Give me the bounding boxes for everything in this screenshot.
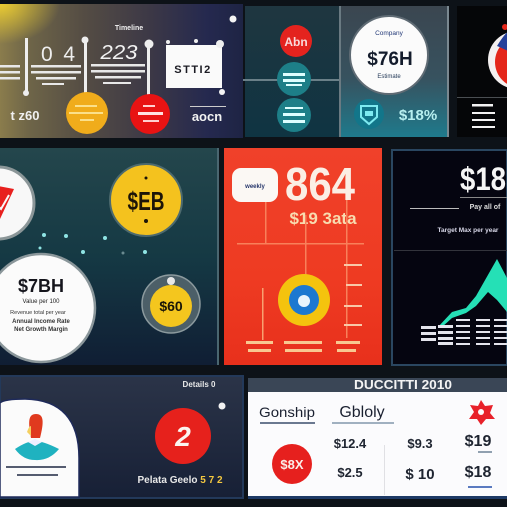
icon: red check circle bbox=[0, 167, 34, 239]
bars bbox=[421, 319, 507, 345]
text block: left bbox=[0, 65, 20, 80]
white arch card bbox=[0, 399, 79, 497]
panel: bottom right table bbox=[248, 378, 507, 499]
dots bbox=[219, 16, 236, 95]
stat: 223: 223 bbox=[99, 42, 138, 64]
panel: black chart bbox=[392, 150, 507, 365]
table values bbox=[334, 433, 491, 483]
timeline stem: second bbox=[82, 36, 88, 98]
circle: red bbox=[130, 94, 170, 134]
rule and caption bbox=[410, 197, 507, 211]
stat: 84: 0 4 bbox=[41, 43, 75, 66]
card: white note: STTI2 bbox=[174, 64, 212, 76]
panel: red chart bbox=[224, 148, 382, 365]
circle: yellow SEB bbox=[110, 164, 182, 236]
circle: price: Estimate bbox=[377, 74, 401, 80]
table values: $2.5 bbox=[337, 465, 363, 480]
circle: white stat bbox=[0, 254, 95, 362]
heading: Details 0 bbox=[183, 380, 216, 389]
stat: 864: 864 bbox=[285, 158, 355, 210]
badge: teal one bbox=[277, 62, 311, 96]
timeline stem: third bbox=[144, 40, 154, 96]
panel: teal icon column bbox=[243, 6, 341, 137]
text block: middle bbox=[31, 65, 81, 85]
dot bbox=[218, 402, 226, 410]
circle: price: Company bbox=[375, 30, 404, 37]
caption two: Target Max per year bbox=[438, 227, 499, 234]
icon: red globe bbox=[488, 24, 507, 89]
subtitle: $19 3ata bbox=[289, 209, 357, 228]
caption: Pelata Geelo 5 7 2 bbox=[137, 475, 223, 486]
label: bottom right: aocn bbox=[192, 109, 222, 124]
circle: price: $76H bbox=[367, 49, 413, 70]
label: bottom left: t z60 bbox=[11, 108, 39, 123]
table sublabels bbox=[468, 451, 492, 488]
circle: white stat: Revenue total per year bbox=[10, 310, 66, 316]
icon: buoy bbox=[15, 414, 59, 460]
rule and caption: Pay all of bbox=[470, 204, 501, 211]
ticks bbox=[344, 264, 362, 326]
badge: red bbox=[272, 444, 312, 484]
chart axes bbox=[237, 200, 364, 340]
panel: dark teal circles bbox=[0, 148, 219, 365]
badge: 2 bbox=[155, 408, 211, 464]
circle: white stat: Value per 100 bbox=[23, 299, 60, 305]
panel: bottom left bbox=[0, 376, 243, 498]
card: white note bbox=[166, 39, 224, 88]
table values: $ 10 bbox=[405, 466, 435, 483]
circle: price bbox=[350, 16, 428, 94]
scattered dots bbox=[38, 233, 147, 254]
pill: weekly bbox=[244, 184, 266, 190]
circle: white stat: $7BH bbox=[18, 276, 64, 296]
column title: two: Gbloly bbox=[339, 404, 385, 421]
table values: $19 bbox=[465, 433, 491, 450]
circle: yellow SEB: $EB bbox=[128, 186, 164, 216]
circle: white stat: Annual Income Rate bbox=[12, 319, 70, 325]
column title: one: Gonship bbox=[259, 404, 315, 420]
badge: teal two bbox=[277, 98, 311, 132]
icon: shield bbox=[354, 99, 384, 129]
badge: red: $8X bbox=[280, 457, 304, 472]
target bbox=[278, 274, 330, 326]
circle: small yellow: $60 bbox=[159, 298, 183, 314]
text block: right bbox=[91, 64, 145, 84]
text lines bbox=[472, 104, 495, 128]
timeline stem: first bbox=[23, 38, 29, 96]
heading: top label: Timeline bbox=[115, 25, 143, 32]
column title: two bbox=[332, 404, 394, 424]
stat: percent: $18% bbox=[399, 107, 437, 124]
circle: small yellow bbox=[142, 275, 200, 333]
panel: black top right bbox=[457, 6, 507, 137]
pill bbox=[232, 168, 278, 202]
area chart bbox=[438, 259, 507, 327]
table values: $18 bbox=[465, 464, 491, 481]
panel: top timeline bbox=[0, 4, 243, 138]
circle: yellow bbox=[66, 92, 108, 134]
circle: white stat: Net Growth Margin bbox=[14, 327, 68, 333]
badge: red: Abn bbox=[284, 35, 308, 49]
icon: red star bbox=[469, 400, 495, 425]
table values: $12.4 bbox=[334, 436, 367, 451]
heading: DUCCITTI 2010 bbox=[354, 378, 452, 392]
bottom labels bbox=[246, 341, 360, 352]
table values: $9.3 bbox=[407, 436, 433, 451]
caption lines bbox=[6, 466, 66, 476]
badge: 2: 2 bbox=[174, 421, 191, 452]
panel: price circle bbox=[341, 6, 449, 137]
